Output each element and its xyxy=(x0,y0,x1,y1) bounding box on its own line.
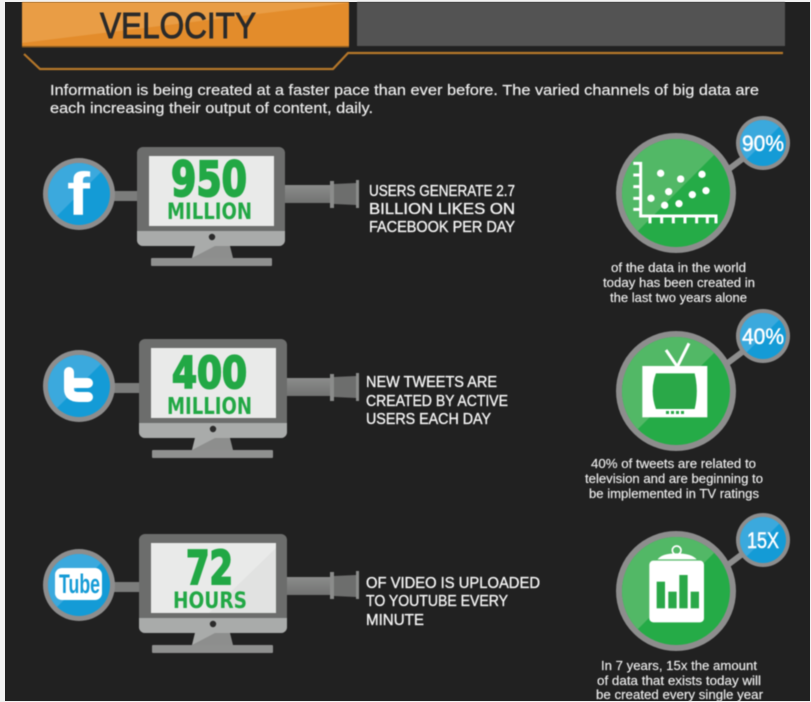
label: tweets: NEW TWEETS ARE xyxy=(366,374,497,391)
row 2: twitter xyxy=(43,339,508,458)
connector: twitter to monitor xyxy=(112,383,141,393)
label: tweets: USERS EACH DAY xyxy=(366,411,491,428)
badge: 15x xyxy=(736,513,790,567)
label: facebook likes: BILLION LIKES ON xyxy=(369,201,515,218)
icon: facebook circle: f xyxy=(67,161,91,228)
icon: youtube circle: Tube xyxy=(59,569,100,599)
intro text: each increasing their output of content, daily. xyxy=(50,100,373,117)
monitor: 400 million xyxy=(139,339,287,458)
caption: 90 percent: today has been created in xyxy=(603,276,755,290)
caption: 15x: of data that exists today will xyxy=(597,674,761,688)
badge: 40%: 40% xyxy=(742,324,784,349)
heading banner: velocity xyxy=(22,2,349,48)
badge: 40% xyxy=(736,309,790,363)
connector: monitor to text xyxy=(287,373,359,401)
monitor: 72 hours: HOURS xyxy=(173,589,247,614)
label: tweets: CREATED BY ACTIVE xyxy=(366,393,508,410)
stat: 15x xyxy=(596,513,790,702)
icon: scatter plot xyxy=(616,133,736,253)
label: facebook likes xyxy=(369,183,515,236)
monitor: 400 million: MILLION xyxy=(167,394,252,420)
label: youtube video: TO YOUTUBE EVERY xyxy=(366,593,508,610)
connector: 15x xyxy=(725,552,745,567)
monitor: 950 million xyxy=(137,147,285,266)
badge: 15x: 15X xyxy=(747,528,779,553)
label: facebook likes: FACEBOOK PER DAY xyxy=(369,219,515,236)
monitor: 400 million: 400 xyxy=(172,348,247,399)
intro text: Information is being created at a faster pace than ever before. The varied channels of big data are xyxy=(50,82,759,99)
stat: 40 percent xyxy=(585,309,790,501)
intro text xyxy=(50,82,759,117)
caption: 40 percent xyxy=(585,457,763,501)
caption: 40 percent: be implemented in TV ratings xyxy=(589,487,759,501)
connector: facebook to monitor xyxy=(112,191,139,201)
stat: 90 percent xyxy=(603,116,790,305)
connector: youtube to monitor xyxy=(112,582,141,592)
monitor: 72 hours: 72 xyxy=(186,541,233,595)
grey header bar xyxy=(357,2,785,46)
icon: clipboard chart xyxy=(616,531,736,651)
icon: facebook circle xyxy=(43,158,115,230)
label: tweets xyxy=(366,374,508,428)
badge: 90%: 90% xyxy=(742,131,784,156)
connector: 40 percent xyxy=(725,350,745,365)
monitor: 950 million: 950 xyxy=(171,152,247,208)
icon: youtube circle xyxy=(43,549,115,621)
row 3: youtube xyxy=(43,534,540,653)
badge: 90% xyxy=(736,116,790,170)
icon: twitter circle xyxy=(43,350,115,422)
label: facebook likes: USERS GENERATE 2.7 xyxy=(369,183,515,200)
orange bracket line xyxy=(24,53,783,69)
caption: 15x: be created every single year xyxy=(596,688,763,702)
caption: 40 percent: 40% of tweets are related to xyxy=(591,457,756,471)
caption: 90 percent: the last two years alone xyxy=(610,291,747,305)
label: youtube video xyxy=(366,575,540,629)
icon: television xyxy=(616,331,736,451)
caption: 15x xyxy=(596,659,763,702)
caption: 90 percent xyxy=(603,261,755,305)
row 1: facebook xyxy=(43,147,515,266)
label: youtube video: MINUTE xyxy=(366,612,424,629)
connector: monitor to text xyxy=(285,180,359,208)
heading banner: velocity: VELOCITY xyxy=(100,5,256,46)
caption: 90 percent: of the data in the world xyxy=(611,261,746,275)
monitor: 72 hours xyxy=(139,534,287,653)
label: youtube video: OF VIDEO IS UPLOADED xyxy=(366,575,540,592)
connector: monitor to text xyxy=(287,571,359,599)
caption: 15x: In 7 years, 15x the amount xyxy=(601,659,758,673)
monitor: 950 million: MILLION xyxy=(167,200,252,225)
caption: 40 percent: television and are beginning to xyxy=(585,472,763,486)
connector: 90 percent xyxy=(725,157,745,172)
